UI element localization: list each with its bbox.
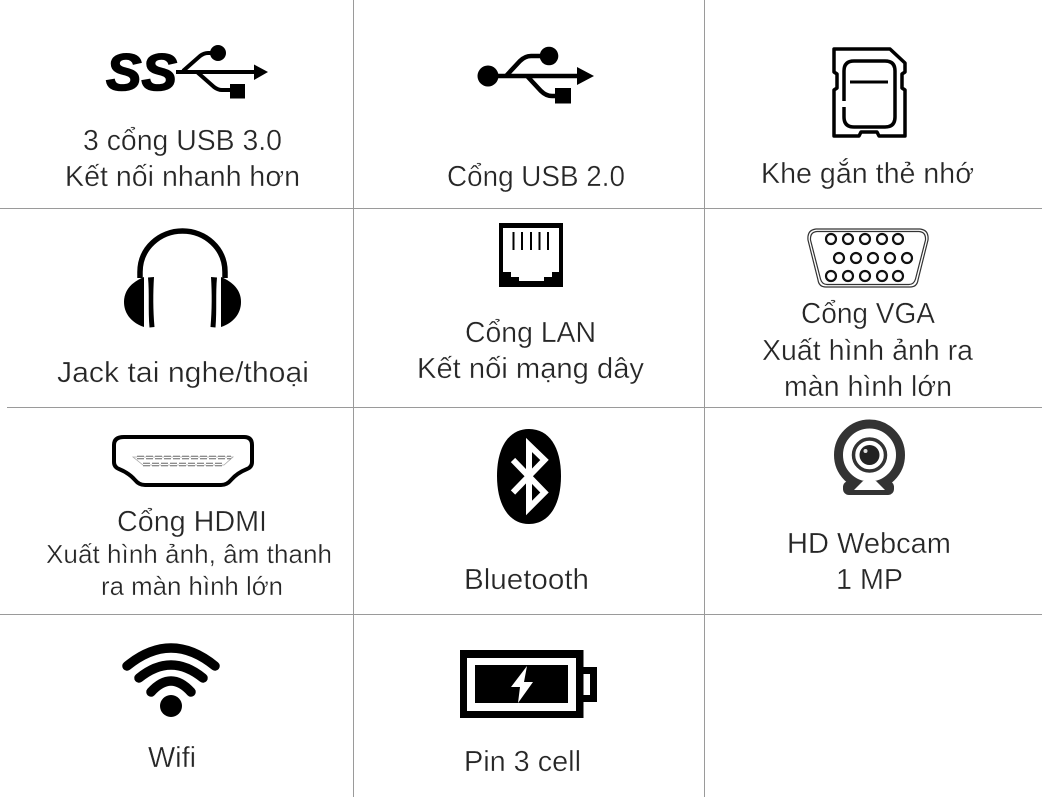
icon: USB — [478, 47, 594, 104]
panel: webcam — [787, 424, 951, 596]
panel: USB 3.0 — [65, 44, 300, 193]
label: HDMI: ra màn hình lớn — [101, 571, 283, 601]
panel: VGA — [762, 229, 974, 403]
label: headphone jack: Jack tai nghe/thoại — [57, 357, 309, 389]
icon: battery — [460, 650, 597, 718]
label: VGA: Xuất hình ảnh ra — [762, 335, 974, 367]
label: webcam: 1 MP — [836, 564, 903, 596]
label: LAN: Kết nối mạng dây — [417, 353, 644, 385]
label: Wifi: Wifi — [148, 742, 196, 774]
label: webcam — [787, 528, 951, 596]
icon: VGA port — [808, 229, 928, 287]
label: USB 3.0: Kết nối nhanh hơn — [65, 161, 300, 193]
icon: SuperSpeed USB — [106, 44, 268, 102]
label: USB 3.0 — [65, 125, 300, 193]
icon: Wifi — [127, 648, 215, 717]
icon: SD card — [834, 49, 905, 136]
icon: HDMI port — [114, 437, 252, 485]
label: HDMI — [46, 506, 332, 601]
label: USB 3.0: 3 cổng USB 3.0 — [83, 125, 282, 157]
panel: headphone jack — [57, 231, 309, 389]
label: VGA — [762, 298, 974, 403]
label: LAN: Cổng LAN — [465, 317, 596, 349]
icon: webcam — [838, 424, 900, 495]
label: VGA: màn hình lớn — [784, 371, 952, 403]
icon: headphones — [124, 231, 241, 328]
panel: battery — [460, 650, 597, 778]
label: VGA: Cổng VGA — [801, 298, 936, 330]
label: memory card slot: Khe gắn thẻ nhớ — [761, 157, 974, 190]
label: Bluetooth: Bluetooth — [464, 564, 589, 596]
label: webcam: HD Webcam — [787, 528, 951, 560]
label: LAN — [417, 317, 644, 385]
label: battery: Pin 3 cell — [464, 746, 581, 778]
icon: LAN port — [499, 223, 563, 287]
panel: HDMI — [46, 437, 332, 601]
label: USB 2.0: Cổng USB 2.0 — [447, 161, 625, 193]
panel: Bluetooth — [464, 429, 589, 596]
icon: Bluetooth — [497, 429, 561, 524]
panel: LAN — [417, 223, 644, 385]
panel: Wifi — [127, 648, 215, 774]
panel: USB 2.0 — [447, 47, 625, 193]
icon: SuperSpeed USB: SS — [106, 44, 177, 102]
panel: memory card slot — [761, 49, 974, 190]
label: HDMI: Xuất hình ảnh, âm thanh — [46, 539, 332, 569]
label: HDMI: Cổng HDMI — [117, 506, 267, 538]
